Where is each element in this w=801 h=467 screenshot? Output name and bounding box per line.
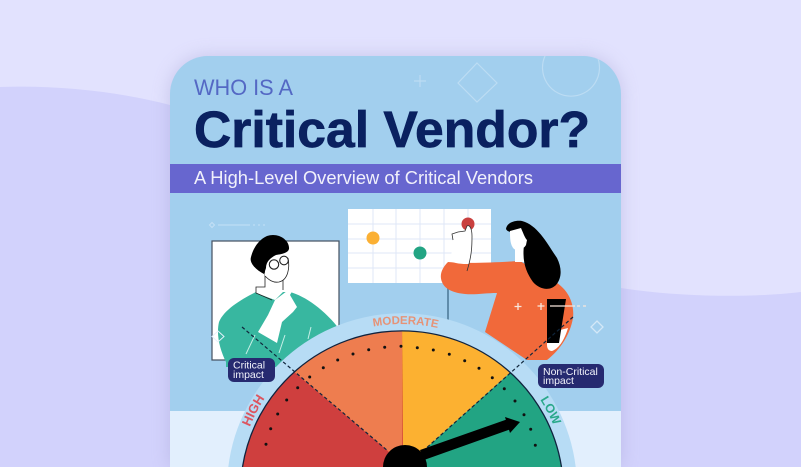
neck (515, 248, 524, 262)
diamond right (591, 321, 603, 333)
segment: moderate (295, 332, 402, 452)
panel: card (170, 56, 621, 467)
callout: critical impact (228, 358, 275, 382)
marker: red (462, 218, 474, 230)
callout: non-critical impact: Non-Critical (543, 366, 598, 378)
segment: high (243, 332, 403, 467)
decorative shapes (414, 56, 600, 102)
raised hand (452, 226, 472, 264)
chart board (348, 209, 491, 320)
face (510, 228, 527, 250)
collar and neck (256, 292, 283, 300)
sparkles (514, 303, 588, 310)
banner (170, 164, 621, 193)
gauge ring (228, 313, 576, 467)
face (265, 270, 284, 280)
decorative line (210, 222, 266, 228)
banner: A High-Level Overview of Critical Vendors (194, 167, 533, 188)
glasses (269, 256, 288, 269)
title: Critical Vendor? (194, 101, 590, 158)
callout: non-critical impact: impact (543, 375, 574, 387)
hair (251, 235, 289, 274)
heading: who is a: WHO IS A (194, 75, 293, 100)
label: high: HIGH (242, 394, 264, 426)
hub (383, 445, 427, 467)
arrow (420, 417, 520, 460)
gauge (240, 317, 573, 467)
marker: green (414, 246, 426, 260)
callout: non-critical impact (538, 364, 604, 388)
book and lower hand (547, 328, 568, 351)
callout: critical impact: Critical (233, 360, 265, 372)
tick dots (264, 345, 537, 447)
segment: low (426, 374, 561, 467)
hand (258, 292, 297, 343)
illustration: man (212, 235, 340, 367)
marker: yellow (366, 232, 380, 244)
label: moderate: MODERATE (372, 316, 439, 328)
hair (506, 221, 561, 289)
boundary dashes (242, 317, 573, 451)
callout: critical impact: impact (233, 369, 264, 381)
body and sleeve (441, 261, 573, 360)
illustration: woman (441, 221, 588, 360)
segment: critical (402, 332, 510, 452)
sweater (218, 292, 340, 367)
diamond left (212, 331, 224, 342)
label: low: LOW (540, 396, 562, 424)
